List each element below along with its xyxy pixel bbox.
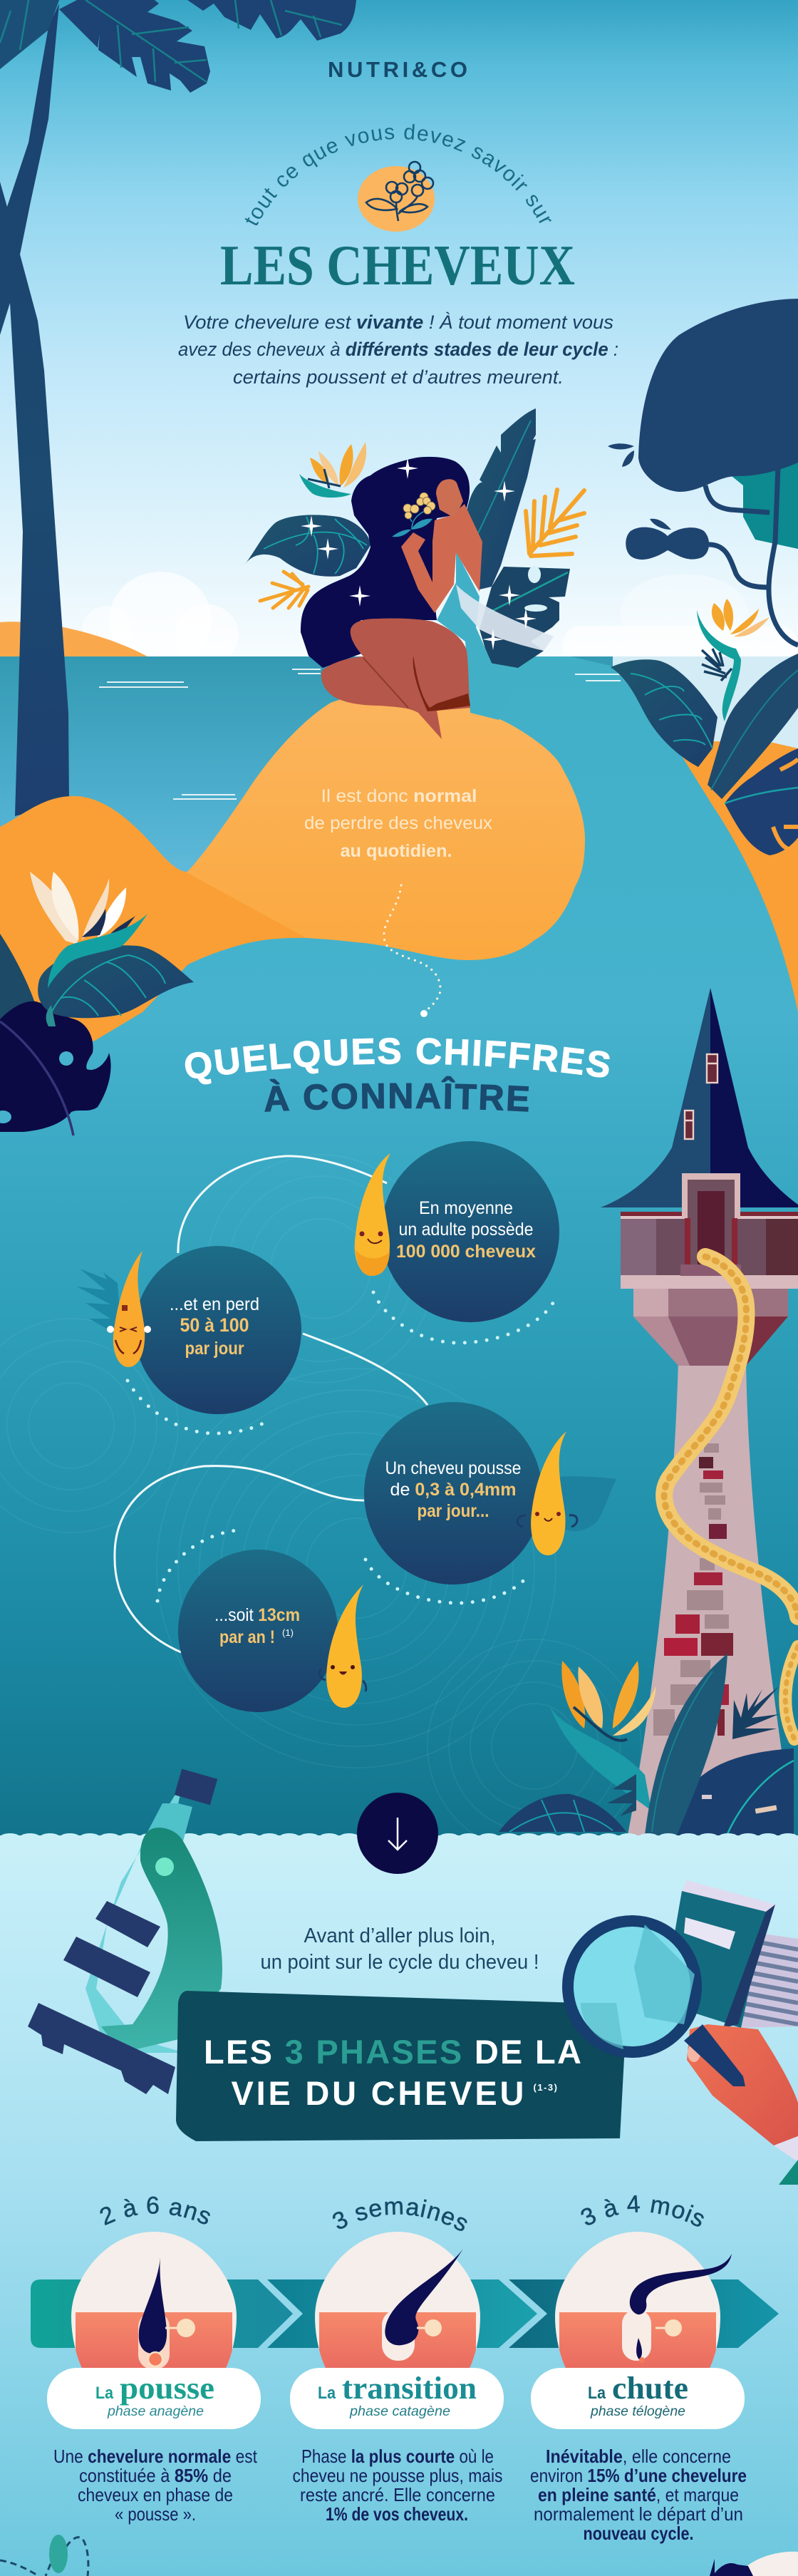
left dark leaf behind (0, 934, 36, 1026)
phase label: la pousse: pousse (120, 2371, 214, 2406)
phase 1 illustration (71, 2232, 237, 2376)
left orange fern (260, 572, 309, 608)
stat circle: 13cm: (1) (282, 1627, 294, 1638)
phase 1 description (53, 2446, 258, 2525)
phase 2 description: cheveu ne pousse plus, mais (292, 2465, 503, 2486)
lower section background (0, 1835, 798, 2576)
hair character 2 (107, 1251, 151, 1367)
stat circle: 100 000: un adulte possède (399, 1220, 533, 1240)
bottom right cut-off illustration (710, 2552, 798, 2576)
stat circle: 50 a 100 (135, 1246, 301, 1414)
phase label: la chute: La (588, 2384, 606, 2403)
stat circle: 100 000: 100 000 cheveux (396, 1242, 536, 1262)
phase 1 description: constituée à 85% de (79, 2465, 232, 2486)
hair character 4 (319, 1585, 366, 1708)
section heading: QUELQUES CHIFFRES (185, 1038, 610, 1085)
arm and torso (401, 504, 482, 613)
phase 3 illustration (555, 2232, 732, 2376)
background monstera near hair 3 (556, 1476, 616, 1531)
intro text: Votre chevelure est vivante ! À tout moment vous (183, 311, 613, 333)
hand flower (392, 493, 435, 537)
blob text: au quotidien. (341, 841, 452, 861)
phase label: la chute: chute (612, 2371, 688, 2406)
phase label: la transition: La (318, 2384, 336, 2403)
bottom left dashed trail (0, 2535, 88, 2576)
palm leaves (0, 0, 356, 93)
left white flower (30, 872, 147, 989)
sea glints (99, 669, 621, 799)
hair character 1 (355, 1153, 390, 1276)
section heading: À CONNAÎTRE (264, 1076, 529, 1112)
palm trunk (0, 4, 69, 816)
under balcony (633, 1289, 668, 1317)
braid (664, 1257, 798, 1739)
phase 2 description: Phase la plus courte où le (301, 2446, 494, 2467)
phase 1 description: « pousse ». (115, 2503, 196, 2525)
stat circle: 13cm (178, 1550, 338, 1712)
sky background (0, 0, 798, 659)
phase label: la transition: phase catagène (349, 2404, 450, 2419)
face (436, 479, 463, 517)
sun with flower icon (358, 162, 435, 232)
door (680, 1173, 741, 1276)
phase 1 description: Une chevelure normale est (53, 2446, 258, 2467)
duration labels (100, 2195, 704, 2231)
phase label: la pousse (47, 2368, 261, 2429)
tower shaft (626, 1361, 796, 1846)
pale sash (456, 584, 554, 651)
phase label: la pousse: La (95, 2384, 114, 2403)
intro to phases (261, 1925, 539, 1974)
pale horizon on the right (613, 656, 798, 749)
intro text: certains poussent et d’autres meurent. (233, 366, 564, 388)
left leaf (244, 515, 370, 577)
long hair (301, 457, 470, 668)
stat circle: 13cm: par an ! (219, 1627, 275, 1647)
stat circle: 50 a 100: ...et en perd (170, 1294, 259, 1314)
phase 3 description: environ 15% d’une chevelure (530, 2465, 747, 2486)
legs (321, 618, 470, 739)
sparkles (301, 458, 537, 650)
left monstera (0, 1001, 111, 1135)
monstera leaf (480, 566, 570, 668)
phase 2 description (292, 2446, 503, 2525)
left hill sand (0, 796, 306, 1069)
phase 3 description (530, 2446, 747, 2544)
clouds (82, 572, 798, 669)
left leaf (38, 945, 194, 1026)
tower foot flower (549, 1661, 656, 1810)
phase 3 description: Inévitable, elle concerne (546, 2446, 731, 2467)
phase label: la transition (290, 2368, 504, 2429)
intro text (178, 311, 618, 388)
hair character 3 (517, 1431, 577, 1555)
phase 3 description: nouveau cycle. (583, 2523, 694, 2544)
woman illustration (244, 408, 584, 739)
phase 2 description: 1% de vos cheveux. (326, 2503, 468, 2525)
stat circle: 0,3 a 0,4mm: Un cheveu pousse (385, 1458, 522, 1478)
connector lines (115, 1156, 428, 1652)
phase 3 description: en pleine santé, et marque (538, 2484, 739, 2505)
right bird of paradise flower (697, 599, 770, 721)
stat circle: 0,3 a 0,4mm (364, 1402, 542, 1585)
magnifier and hand (568, 1921, 798, 2185)
wave edge (0, 1830, 798, 1837)
central sand blob (187, 689, 585, 960)
phase 2 description: reste ancré. Elle concerne (300, 2484, 495, 2505)
phase label: la chute (531, 2368, 745, 2429)
stat circle: 13cm: ...soit 13cm (214, 1605, 300, 1625)
title panel: VIE DU CHEVEU (231, 2074, 524, 2112)
stat circle: 100 000 (381, 1141, 559, 1322)
water swirl lines (0, 1155, 641, 1853)
title panel: (1-3) (534, 2082, 558, 2093)
phase 3 description: normalement le départ d’un (534, 2503, 743, 2525)
bird of paradise (299, 442, 366, 498)
dress sash (437, 551, 513, 720)
phase label: la transition: transition (342, 2371, 477, 2406)
intro text: avez des cheveux à différents stades de leur cycle : (178, 339, 618, 360)
right orange fern (526, 490, 584, 556)
phase 2 illustration (315, 2232, 480, 2376)
phase 1 description: cheveux en phase de (78, 2484, 233, 2505)
main title: LES CHEVEUX (220, 235, 575, 297)
curved subtitle: tout ce que vous devez savoir sur (245, 124, 551, 225)
stat circle: 0,3 a 0,4mm: de 0,3 à 0,4mm (390, 1480, 516, 1500)
blob text: de perdre des cheveux (304, 813, 493, 833)
big water shape (0, 656, 798, 1839)
dotted path from blob (384, 885, 440, 1017)
roof windows (685, 1054, 717, 1139)
stat circle: 100 000: En moyenne (419, 1198, 513, 1218)
duration labels: 3 à 4 mois (581, 2195, 704, 2227)
blob text: Il est donc normal (321, 786, 477, 806)
right foliage (611, 654, 798, 855)
section heading (185, 1038, 610, 1112)
microscope (28, 1769, 222, 2094)
book behind magnifier (663, 1880, 798, 2028)
stat circle: 50 a 100: 50 à 100 (180, 1314, 249, 1336)
sea (0, 656, 798, 956)
phase band arrows (31, 2279, 779, 2348)
blob text (304, 786, 493, 861)
duration labels: 3 semaines (332, 2199, 467, 2231)
title panel (176, 1991, 627, 2141)
brand logo: NUTRI&CO (328, 57, 467, 82)
background leaf near hair 2 (77, 1269, 121, 1333)
phase label: la pousse: phase anagène (107, 2404, 204, 2419)
tower bricks (653, 1443, 733, 1736)
tower (601, 988, 798, 1846)
duration labels: 2 à 6 ans (100, 2197, 210, 2225)
feather leaf (467, 408, 536, 589)
roof (601, 988, 710, 1207)
intro to phases: Avant d’aller plus loin, (304, 1925, 496, 1947)
right tree silhouette (608, 299, 798, 645)
phase label: la chute: phase télogène (590, 2404, 685, 2419)
tower foliage (499, 1654, 794, 1835)
distant sand on the horizon (0, 622, 147, 656)
stat circle: 50 a 100: par jour (185, 1339, 244, 1359)
stat circle: 0,3 a 0,4mm: par jour... (418, 1501, 489, 1521)
round arrow button (357, 1793, 438, 1874)
balcony wall (621, 1218, 798, 1275)
right sand (614, 702, 798, 1026)
intro to phases: un point sur le cycle du cheveu ! (261, 1951, 539, 1974)
title panel: LES 3 PHASES DE LA (204, 2033, 581, 2071)
dotted arcs (128, 1292, 555, 1603)
